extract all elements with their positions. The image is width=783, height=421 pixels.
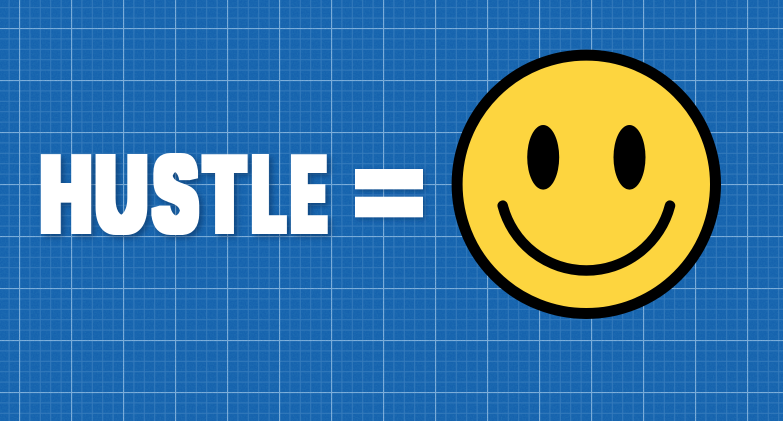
smile xyxy=(503,206,670,270)
headline: HUSTLE: L xyxy=(254,135,283,254)
headline: HUSTLE: U xyxy=(96,135,147,253)
headline: HUSTLE: E xyxy=(293,136,325,254)
icon: smiley face xyxy=(457,55,716,314)
headline: HUSTLE: T xyxy=(206,136,243,254)
equals sign xyxy=(355,169,423,217)
headline: HUSTLE: H xyxy=(41,134,91,253)
headline: HUSTLE xyxy=(41,134,325,254)
left eye xyxy=(527,125,559,190)
right eye xyxy=(614,125,646,190)
headline: HUSTLE: S xyxy=(154,136,197,254)
